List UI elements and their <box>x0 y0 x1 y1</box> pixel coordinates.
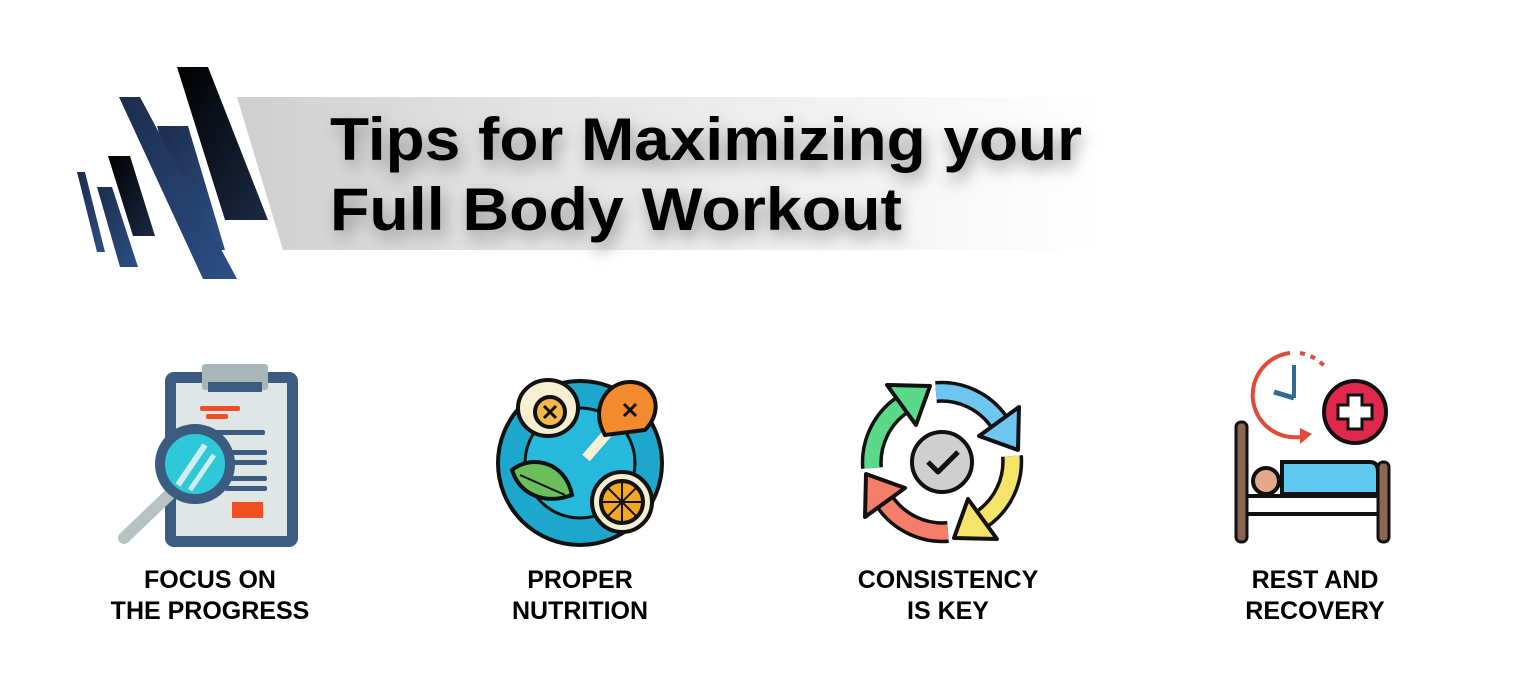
icon: nutrition plate <box>498 380 662 545</box>
label: rest and recovery: RECOVERY <box>1245 597 1385 625</box>
label: consistency is key <box>858 566 1039 625</box>
icon: consistency cycle <box>865 385 1019 539</box>
title: Full Body Workout <box>330 176 902 243</box>
logo bars <box>77 67 268 279</box>
label: focus on the progress <box>111 566 309 625</box>
icon: rest and recovery <box>1236 353 1389 542</box>
label: rest and recovery: REST AND <box>1252 566 1378 594</box>
title: Tips for Maximizing your <box>334 114 1084 181</box>
label: consistency is key: CONSISTENCY <box>858 566 1039 594</box>
label: proper nutrition <box>512 566 648 625</box>
label: proper nutrition: PROPER <box>527 566 633 594</box>
title <box>330 106 1084 251</box>
label: proper nutrition: NUTRITION <box>512 597 648 625</box>
label: consistency is key: IS KEY <box>907 597 989 625</box>
icon: clipboard with magnifier <box>124 364 298 547</box>
title: Tips for Maximizing your <box>330 106 1082 173</box>
label: focus on the progress: FOCUS ON <box>144 566 276 594</box>
title: Full Body Workout <box>334 184 904 251</box>
label: focus on the progress: THE PROGRESS <box>111 597 309 625</box>
header band <box>237 97 1100 250</box>
label: rest and recovery <box>1245 566 1385 625</box>
